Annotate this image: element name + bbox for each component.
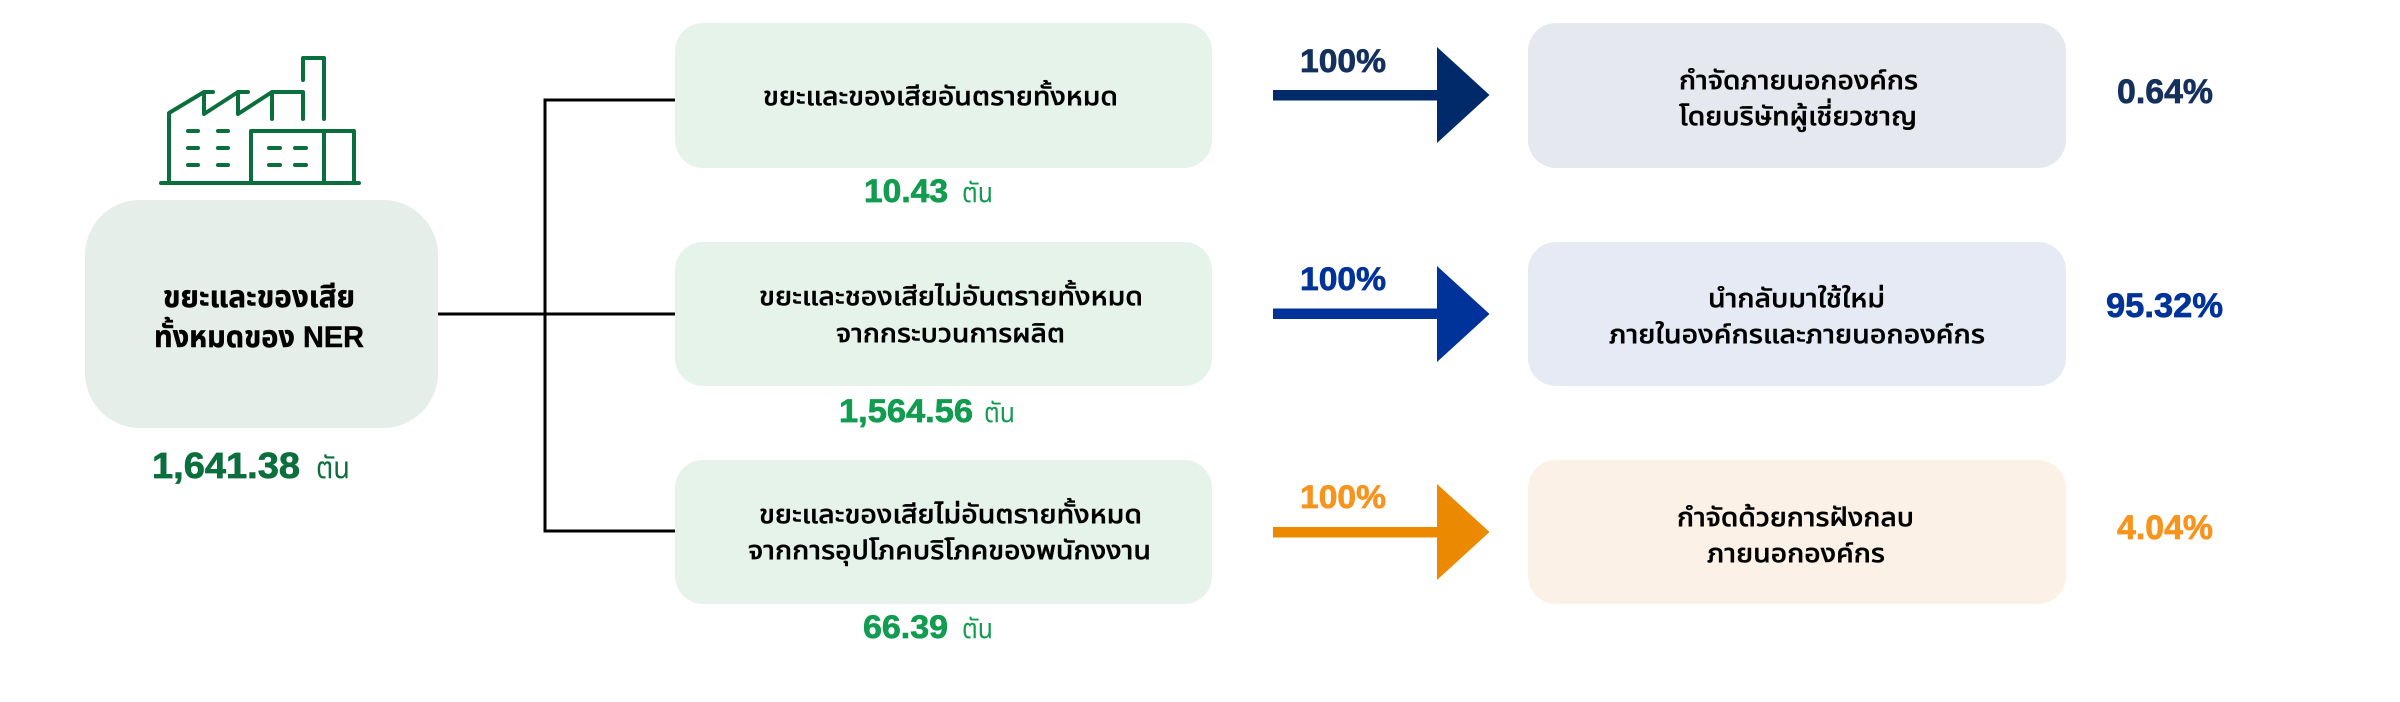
panel: non-hazardous process waste: ขยะและชองเสียไม่อันตรายทั้งหมด — [759, 279, 1143, 311]
process waste value: ตัน — [984, 397, 1015, 428]
hazardous waste value: 10.43 — [864, 173, 948, 209]
panel: non-hazardous employee waste: ขยะและของเสียไม่อันตรายทั้งหมด — [759, 497, 1142, 529]
value: 95.32%: 95.32% — [2106, 287, 2223, 325]
employee waste value: ตัน — [962, 613, 993, 644]
heading: total waste label — [154, 281, 364, 354]
panel: non-hazardous employee waste: จากการอุปโภคบริโภคของพนักงงาน — [748, 535, 1151, 566]
employee waste value: 66.39 — [863, 609, 948, 645]
panel: non-hazardous process waste: จากกระบวนการผลิต — [836, 318, 1065, 348]
panel: non-hazardous process waste — [675, 242, 1212, 386]
arrow: navy — [1273, 43, 1490, 143]
arrow: blue: 100% — [1300, 261, 1386, 297]
total waste value: 1,641.38 — [152, 445, 300, 486]
panel: external disposal by specialists — [1528, 23, 2066, 168]
panel: hazardous waste — [675, 23, 1212, 168]
panel: landfill: กำจัดด้วยการฝังกลบ — [1677, 502, 1914, 532]
arrow: orange — [1273, 479, 1490, 580]
icon: factory — [161, 58, 359, 183]
panel: landfill: ภายนอกองค์กร — [1707, 538, 1885, 568]
panel: total waste — [85, 200, 438, 428]
panel: external disposal by specialists: กำจัดภายนอกองค์กร — [1679, 65, 1918, 95]
arrow: navy: 100% — [1300, 43, 1386, 79]
panel: non-hazardous employee waste — [675, 460, 1212, 604]
panel: external disposal by specialists: โดยบริษัทผู้เชี่ยวชาญ — [1679, 98, 1917, 132]
heading: total waste label: ขยะและของเสีย — [163, 281, 355, 314]
hazardous waste value — [864, 173, 993, 209]
arrow: orange: 100% — [1300, 479, 1386, 515]
arrow: blue — [1273, 261, 1490, 362]
panel: hazardous waste: ขยะและของเสียอันตรายทั้งหมด — [763, 79, 1118, 111]
panel: recycled: นำกลับมาใช้ใหม่ — [1708, 283, 1885, 313]
employee waste value — [863, 609, 993, 645]
panel: landfill — [1528, 460, 2066, 604]
heading: total waste label: ทั้งหมดของ NER — [154, 316, 364, 354]
panel: recycled: ภายในองค์กรและภายนอกองค์กร — [1609, 319, 1985, 349]
panel: recycled — [1528, 242, 2066, 386]
value: 0.64%: 0.64% — [2117, 73, 2213, 111]
hazardous waste value: ตัน — [962, 177, 993, 208]
connector lines — [438, 98, 675, 532]
total waste value: ตัน — [316, 452, 350, 485]
process waste value: 1,564.56 — [839, 393, 973, 429]
value: 4.04%: 4.04% — [2117, 509, 2213, 547]
